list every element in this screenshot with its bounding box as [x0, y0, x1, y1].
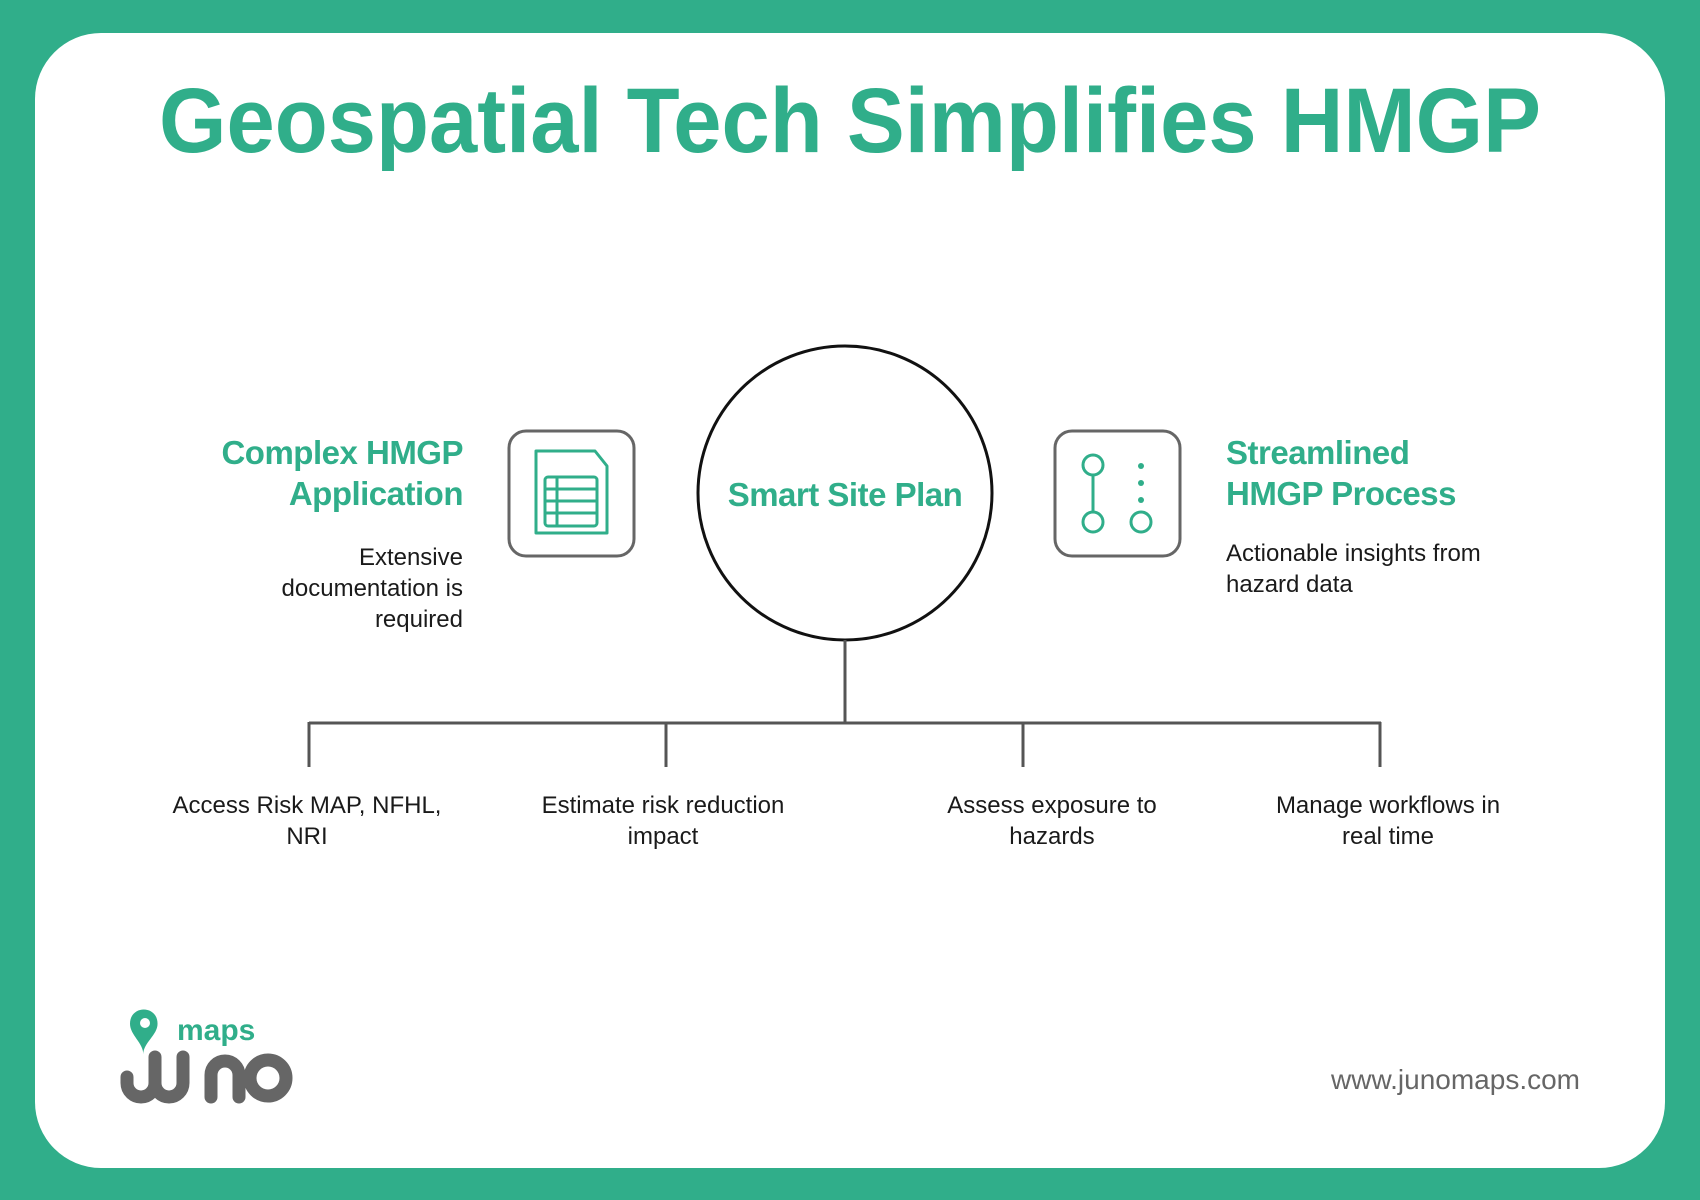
label: Manage workflows: real time — [1342, 823, 1434, 850]
label: Manage workflows: Manage workflows in — [1276, 792, 1500, 819]
label: Access Risk MAP — [172, 792, 441, 850]
footer: website: www.junomaps.com — [1331, 1064, 1580, 1095]
logo: juno maps: maps — [177, 1014, 255, 1047]
left block: Complex HMGP Application: documentation is — [282, 575, 463, 602]
icon: process nodes — [1054, 430, 1182, 558]
right block: Streamlined HMGP Process: HMGP Process — [1226, 475, 1456, 512]
label: Estimate risk reduction: Estimate risk reduction — [542, 792, 784, 819]
label: Assess exposure: Assess exposure to — [947, 792, 1157, 819]
logo: juno maps — [120, 1010, 292, 1104]
right block: Streamlined HMGP Process: Actionable insights from — [1226, 540, 1481, 567]
title: Geospatial Tech Simplifies HMGP — [159, 70, 1541, 172]
left block: Complex HMGP Application: Extensive — [359, 544, 463, 571]
icon: document spreadsheet — [508, 430, 636, 558]
label: Access Risk MAP: NRI — [286, 823, 328, 850]
label: Estimate risk reduction: impact — [628, 823, 698, 850]
label: Assess exposure — [947, 792, 1157, 850]
left block: Complex HMGP Application: Complex HMGP — [221, 434, 463, 471]
right block: Streamlined HMGP Process — [1226, 434, 1481, 598]
right block: Streamlined HMGP Process: Streamlined — [1226, 434, 1409, 471]
label: Access Risk MAP: Access Risk MAP, NFHL, — [173, 792, 441, 819]
right block: Streamlined HMGP Process: hazard data — [1226, 571, 1353, 598]
left block: Complex HMGP Application: Application — [289, 475, 463, 512]
label: Estimate risk reduction — [542, 792, 784, 850]
center label: Smart Site Plan: Smart Site Plan — [728, 476, 962, 513]
left block: Complex HMGP Application: required — [375, 606, 463, 633]
left block: Complex HMGP Application — [221, 434, 463, 633]
label: Manage workflows — [1276, 792, 1500, 850]
label: Assess exposure: hazards — [1009, 823, 1095, 850]
